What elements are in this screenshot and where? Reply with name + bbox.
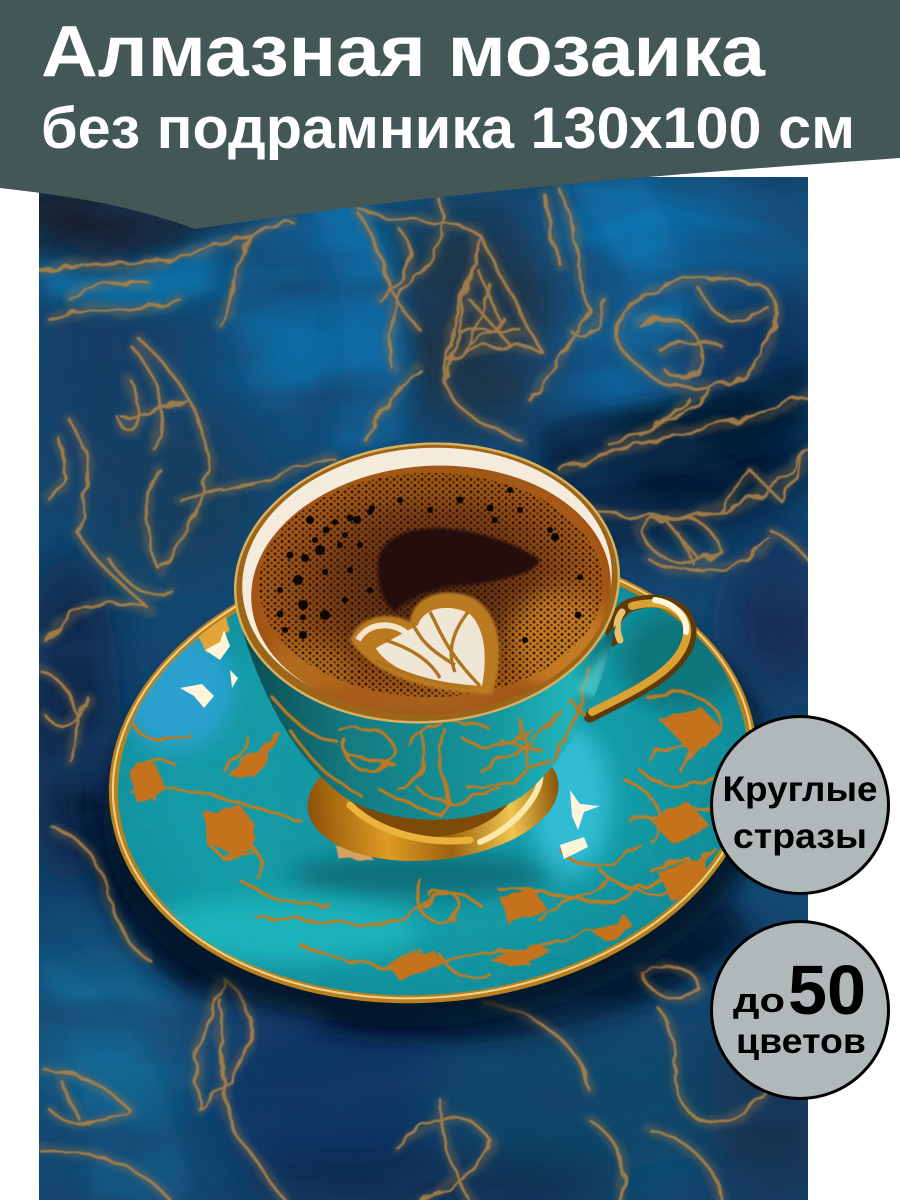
badge: round rhinestones [712, 716, 888, 894]
badge: up to 50 colours: 50 [788, 951, 866, 1029]
cloth background [0, 175, 837, 1200]
latte art heart [350, 592, 499, 694]
bubbles [259, 473, 603, 697]
badge: up to 50 colours: цветов [736, 1022, 866, 1061]
cup rim [236, 444, 618, 722]
badge: round rhinestones: стразы [733, 817, 867, 856]
cup [226, 431, 690, 873]
coffee surface [251, 466, 611, 714]
badge: round rhinestones: Круглые [722, 770, 878, 809]
cup handle [590, 600, 690, 716]
photo: coffee cup on blue silk [0, 175, 837, 1200]
dark centre of coffee [378, 528, 540, 612]
cloth gold embroidery [40, 190, 808, 1200]
badge: up to 50 colours [712, 922, 888, 1098]
badge: up to 50 colours: до [733, 982, 785, 1020]
saucer gold ornament [130, 692, 745, 977]
header banner [0, 0, 900, 229]
heading line 1: Алмазная мозаика [41, 12, 766, 92]
saucer [93, 577, 773, 1038]
title [41, 12, 855, 161]
bright reflections [180, 630, 600, 859]
cup gold scrolls [275, 670, 590, 815]
cup body [240, 622, 616, 820]
crema highlights [250, 468, 610, 715]
heading line 2: без подрамника 130х100 см [41, 96, 855, 161]
saucer reflections [117, 610, 740, 962]
cup foot [308, 766, 558, 861]
